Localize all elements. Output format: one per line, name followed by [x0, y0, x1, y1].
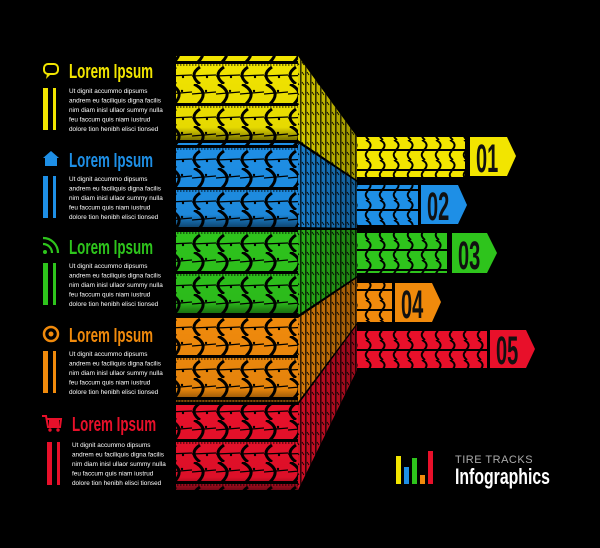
logo: title text: TIRE TRACKS [455, 454, 533, 466]
text block 1: nim diam inisl ullaor summy nulla [69, 107, 163, 114]
text block 4: nim diam inisl ullaor summy nulla [69, 370, 163, 377]
icon: cart [42, 416, 61, 432]
tire tracks wall: front face [176, 56, 298, 490]
text block 5: dolore tion henibh elisci tionsed [72, 480, 162, 487]
heading 2: Lorem Ipsum [69, 149, 153, 172]
text block 2: dolore tion henibh elisci tionsed [69, 214, 159, 221]
panel: item 4 orange [43, 324, 163, 396]
heading 3: Lorem Ipsum [69, 236, 153, 259]
arrow 02 [357, 183, 467, 229]
heading 4: Lorem Ipsum [69, 324, 153, 347]
text block 2: feu faccum quis niam iustrud [69, 204, 151, 212]
icon: aperture [44, 327, 58, 341]
text block 2: Ut dignit accummo dipsums [69, 176, 148, 183]
text block 3: andrem eu faciliquis digna facilis [69, 272, 161, 280]
icon: rss [43, 238, 58, 254]
bars 3 [43, 263, 56, 305]
bars 1 [43, 88, 56, 130]
bars 2 [43, 176, 56, 218]
text block 1: dolore tion henibh elisci tionsed [69, 126, 159, 133]
logo: title text [455, 454, 550, 490]
text block 2: andrem eu faciliquis digna facilis [69, 186, 161, 192]
arrow 01 [357, 135, 516, 181]
text block 5 [72, 442, 166, 487]
text block 2 [69, 176, 163, 221]
arrow 02: 02 [427, 183, 449, 229]
panel: item 5 red [42, 413, 166, 487]
logo: title text: Infographics [455, 466, 550, 490]
panel: item 2 blue [43, 149, 163, 221]
text block 1 [69, 88, 163, 133]
arrow 04: 04 [401, 281, 424, 327]
text block 2: nim diam inisl ullaor summy nulla [69, 195, 163, 202]
tire tracks wall: side face [298, 56, 357, 490]
text block 3: Ut dignit accummo dipsums [69, 263, 148, 270]
text block 5: feu faccum quis niam iustrud [72, 470, 154, 478]
text block 4 [69, 351, 163, 396]
text block 4: dolore tion henibh elisci tionsed [69, 389, 159, 396]
text block 1: andrem eu faciliquis digna facilis [69, 98, 161, 104]
text block 5: andrem eu faciliquis digna facilis [72, 452, 164, 458]
logo: bar chart icon [396, 451, 433, 484]
text block 5: Ut dignit accummo dipsums [72, 442, 150, 449]
text block 3: nim diam inisl ullaor summy nulla [69, 282, 163, 289]
arrow 01: 01 [476, 135, 498, 181]
text block 5: nim diam inisl ullaor summy nulla [72, 461, 166, 468]
arrow 03 [357, 232, 497, 278]
arrow 03: 03 [458, 232, 480, 278]
panel: item 3 green [43, 236, 163, 308]
text block 4: feu faccum quis niam iustrud [69, 380, 151, 386]
text block 3: feu faccum quis niam iustrud [69, 292, 151, 298]
icon: house [43, 151, 59, 166]
icon: speech bubble [44, 64, 58, 79]
arrow 05 [357, 327, 535, 373]
panel: item 1 yellow [43, 60, 163, 133]
text block 3: dolore tion henibh elisci tionsed [69, 301, 159, 308]
text block 1: Ut dignit accummo dipsums [69, 88, 148, 95]
text block 3 [69, 263, 163, 308]
arrow 05: 05 [496, 327, 518, 373]
heading 5: Lorem Ipsum [72, 413, 156, 436]
heading 1: Lorem Ipsum [69, 60, 153, 83]
text block 4: Ut dignit accummo dipsums [69, 351, 148, 358]
arrow 04 [357, 281, 441, 327]
text block 4: andrem eu faciliquis digna facilis [69, 360, 161, 368]
bars 5 [47, 442, 60, 485]
text block 1: feu faccum quis niam iustrud [69, 116, 151, 124]
bars 4 [43, 351, 56, 393]
